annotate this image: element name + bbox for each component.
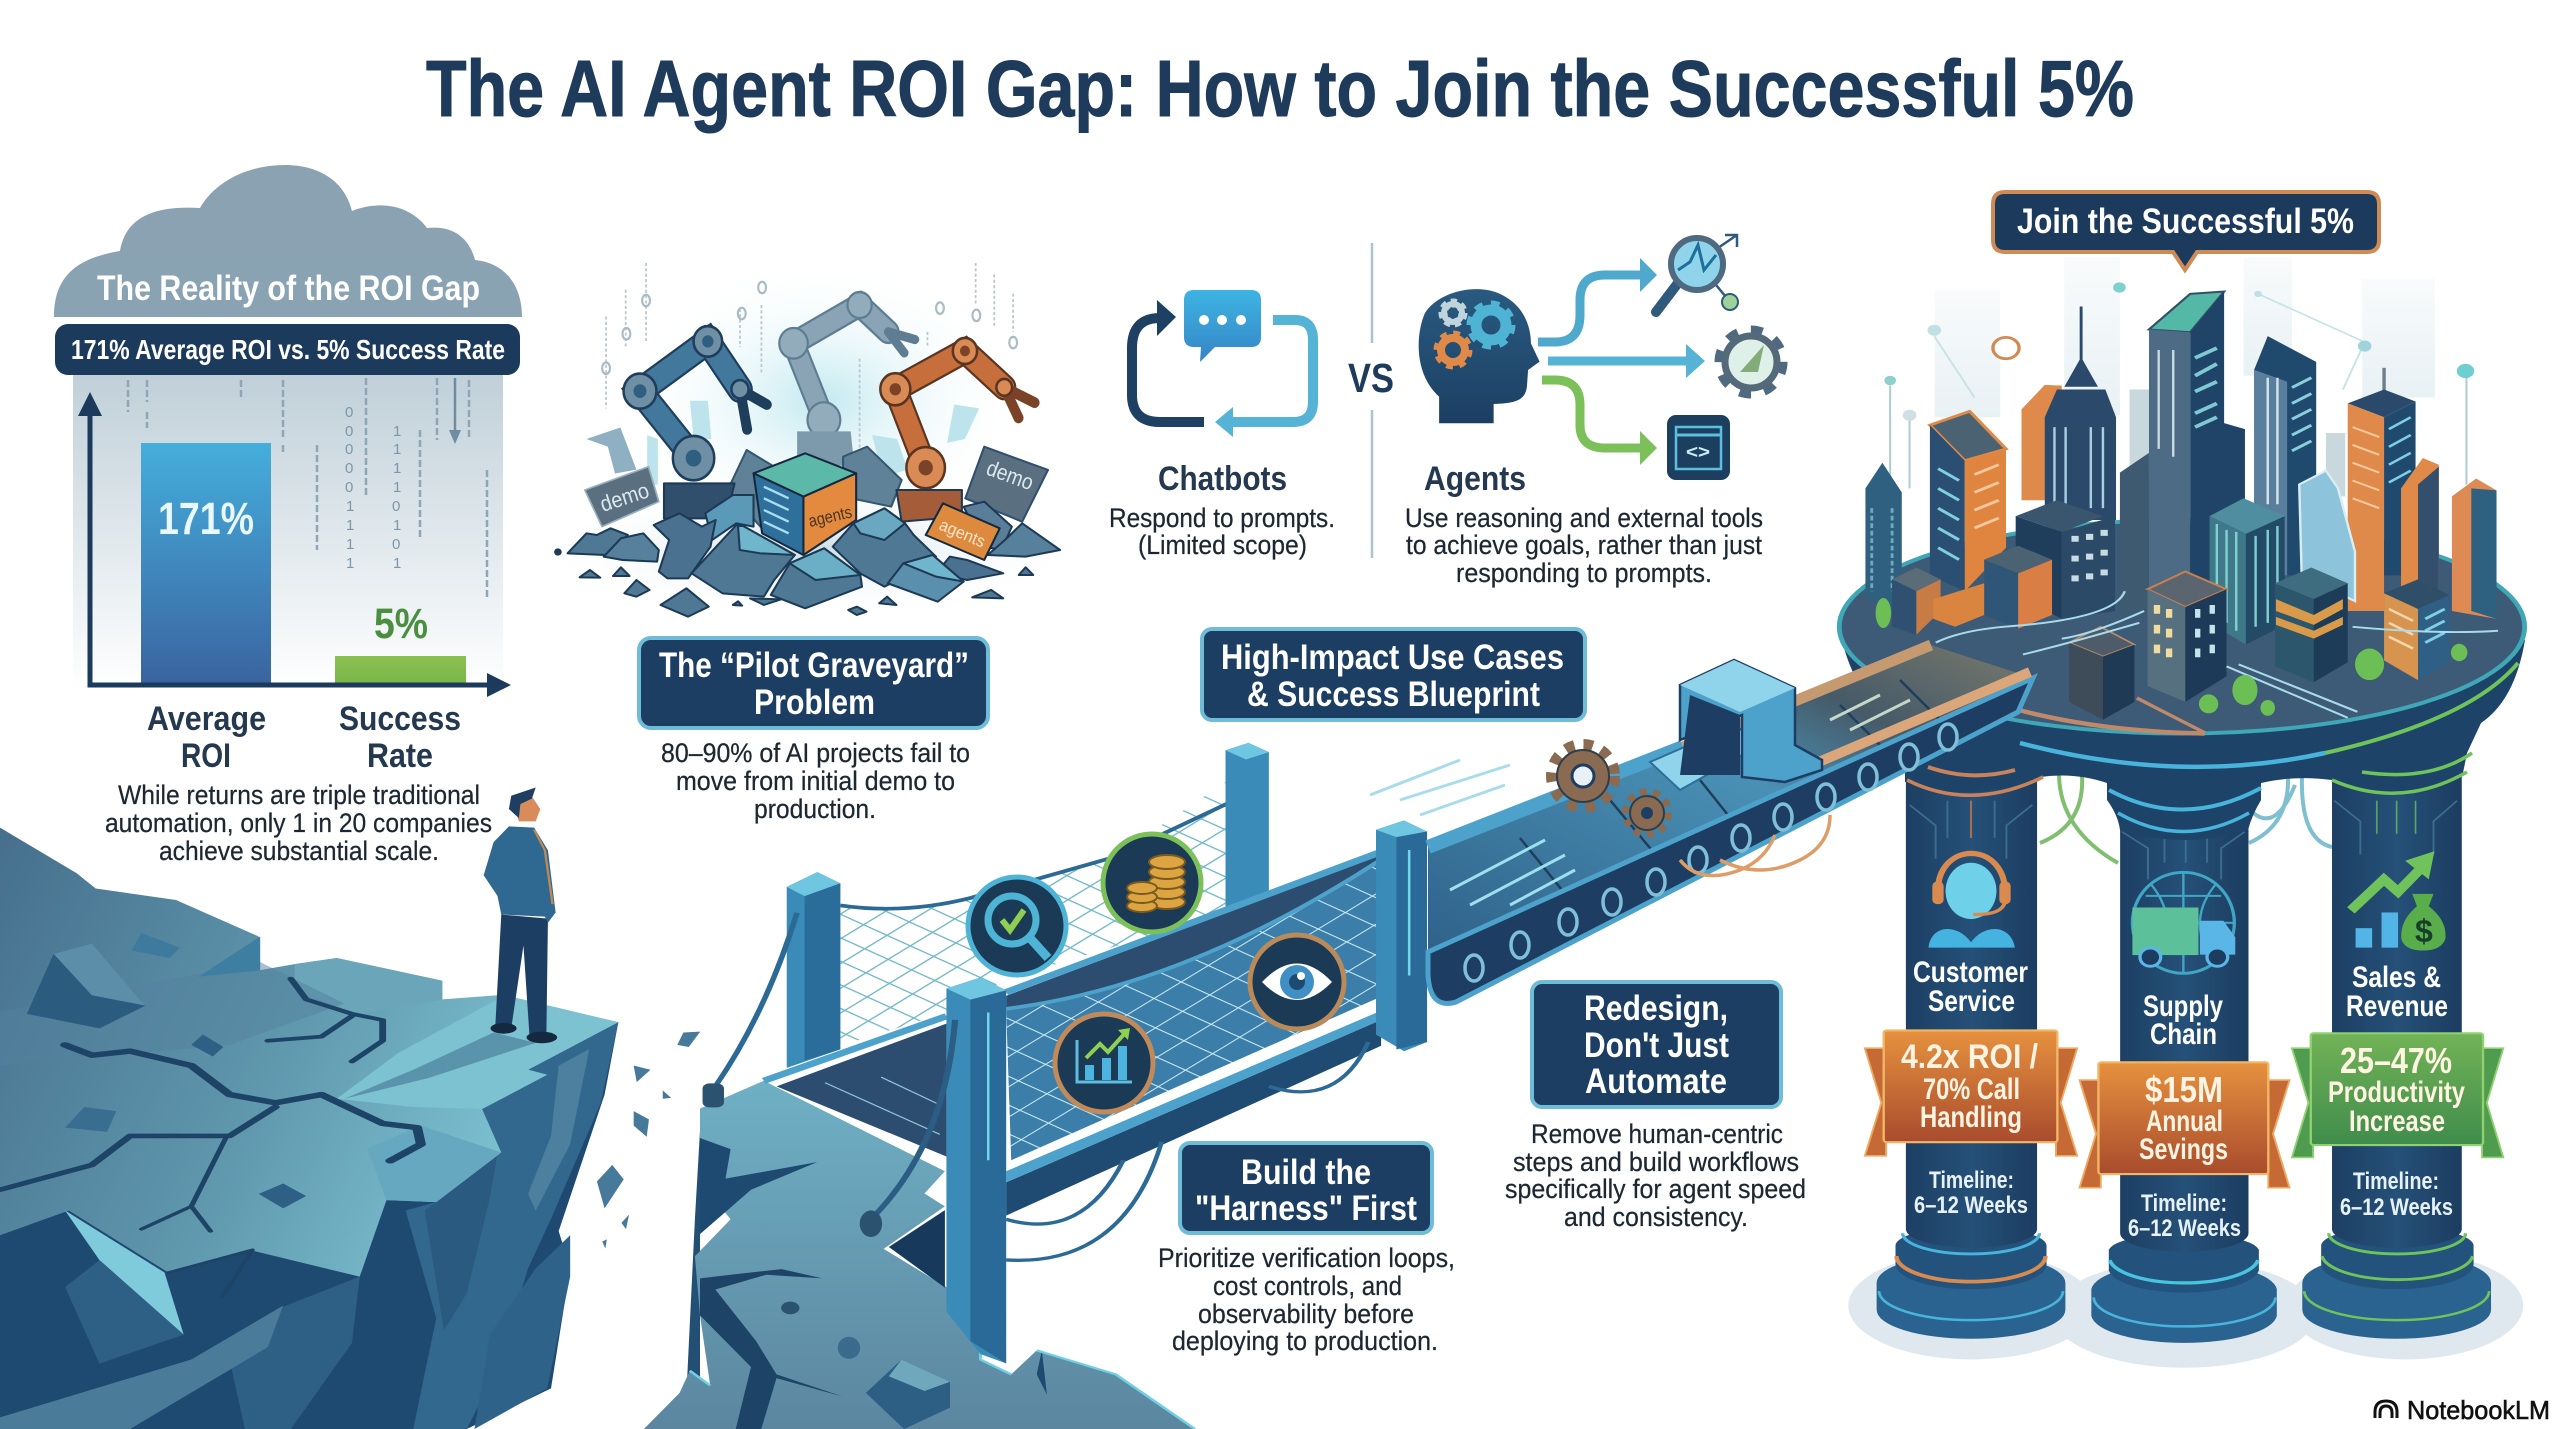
description: achieve substantial scale. (159, 836, 439, 866)
stat: sales and revenue: Productivity (2328, 1076, 2465, 1109)
stat pill (55, 324, 520, 375)
badge: high-impact use cases (1202, 629, 1585, 720)
front posts (946, 977, 1006, 1363)
icon: sales growth and money bag (2351, 851, 2446, 951)
heading badge (639, 638, 988, 728)
mid and front buildings (1892, 471, 2449, 720)
falling binary streaks: 0 (345, 423, 353, 440)
stat: supply chain: Annual (2146, 1105, 2223, 1138)
description: Remove human-centric (1531, 1119, 1783, 1149)
pillar: supply chain column (2091, 792, 2277, 1343)
bar: success rate (335, 600, 466, 683)
falling binary streaks: 1 (393, 441, 401, 458)
axis label: average ROI: ROI (181, 737, 231, 775)
grey arm (794, 305, 915, 420)
callout: join the successful 5%: Join the Successful 5% (2017, 202, 2354, 241)
timeline: sales and revenue: Timeline: (2353, 1168, 2439, 1195)
gears (1553, 746, 1667, 833)
panel: pilot graveyard (533, 259, 1090, 824)
falling binary streaks (128, 378, 487, 600)
agents description: to achieve goals, rather than just (1406, 530, 1762, 560)
faint background debris (586, 428, 636, 473)
timeline: customer service: Timeline: (1929, 1167, 2014, 1194)
falling binary streaks: 1 (346, 517, 354, 534)
trees (1876, 598, 2467, 716)
illustration: broken left cliff (0, 828, 700, 1429)
back skyline (1865, 292, 2497, 619)
timeline: customer service: 6–12 Weeks (1914, 1192, 2028, 1219)
pillar: customer service column (1877, 763, 2065, 1339)
falling binary streaks: 0 (392, 498, 400, 515)
icon: cost control coins (1103, 834, 1201, 932)
illustration: safety net bridge (703, 743, 1427, 1363)
timeline: supply chain: Timeline: (2141, 1190, 2227, 1217)
stat: sales and revenue: Increase (2349, 1105, 2445, 1138)
arrows to tools (1538, 258, 1705, 465)
icon: chatbot loop (1132, 290, 1313, 437)
falling binary streaks: 0 (345, 441, 353, 458)
cloud with heading (54, 165, 522, 317)
axes (78, 392, 511, 697)
scanner gate (1650, 660, 1822, 790)
falling binary streaks: 1 (346, 498, 354, 515)
ribbon: customer service (1865, 1030, 2077, 1156)
stat: customer service: Handling (1920, 1101, 2022, 1134)
badge: high-impact use cases: & Success Blueprint (1247, 675, 1540, 714)
description: observability before (1198, 1299, 1414, 1329)
description: automation, only 1 in 20 companies (105, 808, 492, 838)
falling binary streaks: 1 (346, 555, 354, 572)
description: and consistency. (1564, 1202, 1748, 1232)
label: customer service: Customer (1913, 956, 2028, 989)
icon: customer service agent (1929, 853, 2015, 948)
badge: high-impact use cases: High-Impact Use Cases (1221, 638, 1564, 677)
bar: average ROI: 171% (158, 493, 254, 544)
icon: gear tool (1721, 332, 1781, 392)
axis label: average ROI: Average (147, 700, 266, 738)
loose rocks (27, 933, 306, 1208)
description: steps and build workflows (1513, 1147, 1799, 1177)
badge: Redesign, (1584, 989, 1728, 1028)
description: deploying to production. (1172, 1326, 1438, 1356)
badge: Automate (1585, 1062, 1727, 1101)
falling binary streaks: 0 (345, 460, 353, 477)
illustration: pillar cables (2040, 775, 2332, 863)
data streams (1936, 591, 2498, 718)
falling binary streaks: 1 (393, 460, 401, 477)
sign label: demo left: demo (597, 478, 652, 517)
agents description: Use reasoning and external tools (1405, 503, 1763, 533)
motion lines (1370, 760, 1510, 815)
falling binary streaks: 1 (346, 536, 354, 553)
deck (777, 1024, 946, 1157)
haze towers (1935, 257, 2435, 417)
ribbon: supply chain (2080, 1062, 2290, 1188)
cloud with heading: The Reality of the ROI Gap (97, 269, 480, 308)
badge: Build the (1241, 1153, 1371, 1192)
lower rail (1006, 1020, 1381, 1216)
illustration: right cliff (644, 1081, 1195, 1429)
label: supply chain: Chain (2150, 1018, 2217, 1051)
heading badge: The “Pilot Graveyard” (659, 646, 969, 685)
icon: observability eye (1250, 935, 1344, 1029)
icon: growth chart (1055, 1014, 1153, 1112)
vs label: VS (1348, 355, 1394, 401)
stat: customer service: 4.2x ROI / (1901, 1038, 2038, 1076)
icon: agent head with gears (1419, 289, 1540, 423)
description: move from initial demo to (676, 766, 955, 796)
badge: "Harness" First (1195, 1189, 1417, 1228)
description: specifically for agent speed (1505, 1174, 1806, 1204)
back net (840, 765, 1251, 1046)
icon: code window tool: <> (1686, 442, 1710, 462)
binary particles (606, 263, 1013, 454)
panel: build the harness first (1158, 1143, 1455, 1356)
data rain backdrop (73, 370, 503, 690)
beacons (1884, 282, 2474, 488)
illustration: rubble pile (555, 447, 1060, 617)
description: 80–90% of AI projects fail to (661, 738, 970, 768)
heading badge: Problem (754, 683, 875, 722)
stat: supply chain: $15M (2145, 1069, 2223, 1110)
badge (1532, 982, 1781, 1107)
icon: supply chain truck and globe (2132, 872, 2235, 975)
panel: redesign, don't just automate (1505, 982, 1806, 1232)
falling binary streaks: 0 (345, 404, 353, 421)
stat pill: 171% Average ROI vs. 5% Success Rate (71, 334, 505, 365)
label: supply chain: Supply (2143, 990, 2223, 1023)
cube label: agents: agents (807, 502, 854, 531)
label: sales and revenue: Revenue (2346, 990, 2448, 1023)
chatbots description: Respond to prompts. (1109, 503, 1335, 533)
description: production. (754, 794, 876, 824)
description: While returns are triple traditional (118, 780, 480, 810)
timeline: sales and revenue: 6–12 Weeks (2340, 1194, 2453, 1221)
ribbon: sales and revenue (2292, 1033, 2503, 1157)
pillars (1848, 763, 2523, 1368)
near net (1006, 861, 1379, 1160)
pillar: sales column (2302, 763, 2491, 1339)
stat: supply chain: Sevings (2139, 1133, 2228, 1166)
stat: sales and revenue: 25–47% (2340, 1040, 2452, 1081)
bar chart (78, 392, 511, 775)
bar: success rate: 5% (374, 600, 428, 648)
sign label: demo right: demo (983, 455, 1037, 495)
badge: Don't Just (1584, 1026, 1729, 1065)
divider (1371, 243, 1373, 558)
falling debris (597, 1032, 700, 1249)
platform (1839, 520, 2525, 734)
agents description: responding to prompts. (1456, 558, 1712, 588)
illustration: robot arms (533, 259, 1090, 615)
panel: chatbots vs agents (1109, 235, 1781, 588)
illustration: future city on platform (1839, 257, 2525, 734)
panel: reality of the ROI gap (54, 165, 522, 866)
icon: money bag dollar sign: $ (2415, 913, 2433, 949)
icon: magnifier tool (1656, 235, 1738, 312)
plate label: agents: agents (936, 515, 988, 551)
chatbots description: (Limited scope) (1138, 530, 1307, 560)
label: customer service: Service (1928, 985, 2015, 1018)
heading: agents: Agents (1424, 460, 1526, 498)
icon: verification magnifier (968, 877, 1066, 975)
logo: NotebookLM: NotebookLM (2407, 1395, 2550, 1425)
illustration: person at cliff edge (344, 787, 557, 1099)
stat: customer service: 70% Call (1923, 1073, 2020, 1106)
axis label: success rate: Success (339, 700, 461, 738)
heading: chatbots: Chatbots (1158, 460, 1287, 498)
description: Prioritize verification loops, (1158, 1243, 1455, 1273)
description: cost controls, and (1213, 1271, 1402, 1301)
belt side with rollers (1428, 672, 2033, 1003)
callout: join the successful 5% (1993, 192, 2379, 270)
axis label: success rate: Rate (367, 737, 433, 775)
icon: code window tool (1667, 415, 1730, 480)
illustration: conveyor belt (1370, 645, 2033, 1003)
badge (1180, 1143, 1432, 1233)
orange arm (895, 351, 1035, 468)
bar: average ROI (141, 443, 271, 683)
falling binary streaks: 1 (393, 423, 401, 440)
blue arm (640, 341, 767, 458)
illustration: platform underside and capitals (1840, 630, 2525, 840)
falling binary streaks: 1 (393, 479, 401, 496)
belt (1428, 645, 2033, 952)
falling binary streaks: 0 (345, 479, 353, 496)
timeline: supply chain: 6–12 Weeks (2128, 1215, 2241, 1242)
falling binary streaks: 1 (393, 555, 401, 572)
label: sales and revenue: Sales & (2352, 961, 2441, 994)
back posts (787, 872, 840, 1068)
pillar labels (1901, 913, 2465, 1242)
falling binary streaks: 1 (393, 517, 401, 534)
falling binary streaks: 0 (392, 536, 400, 553)
title: The AI Agent ROI Gap: How to Join the Successful 5% (426, 44, 2134, 133)
